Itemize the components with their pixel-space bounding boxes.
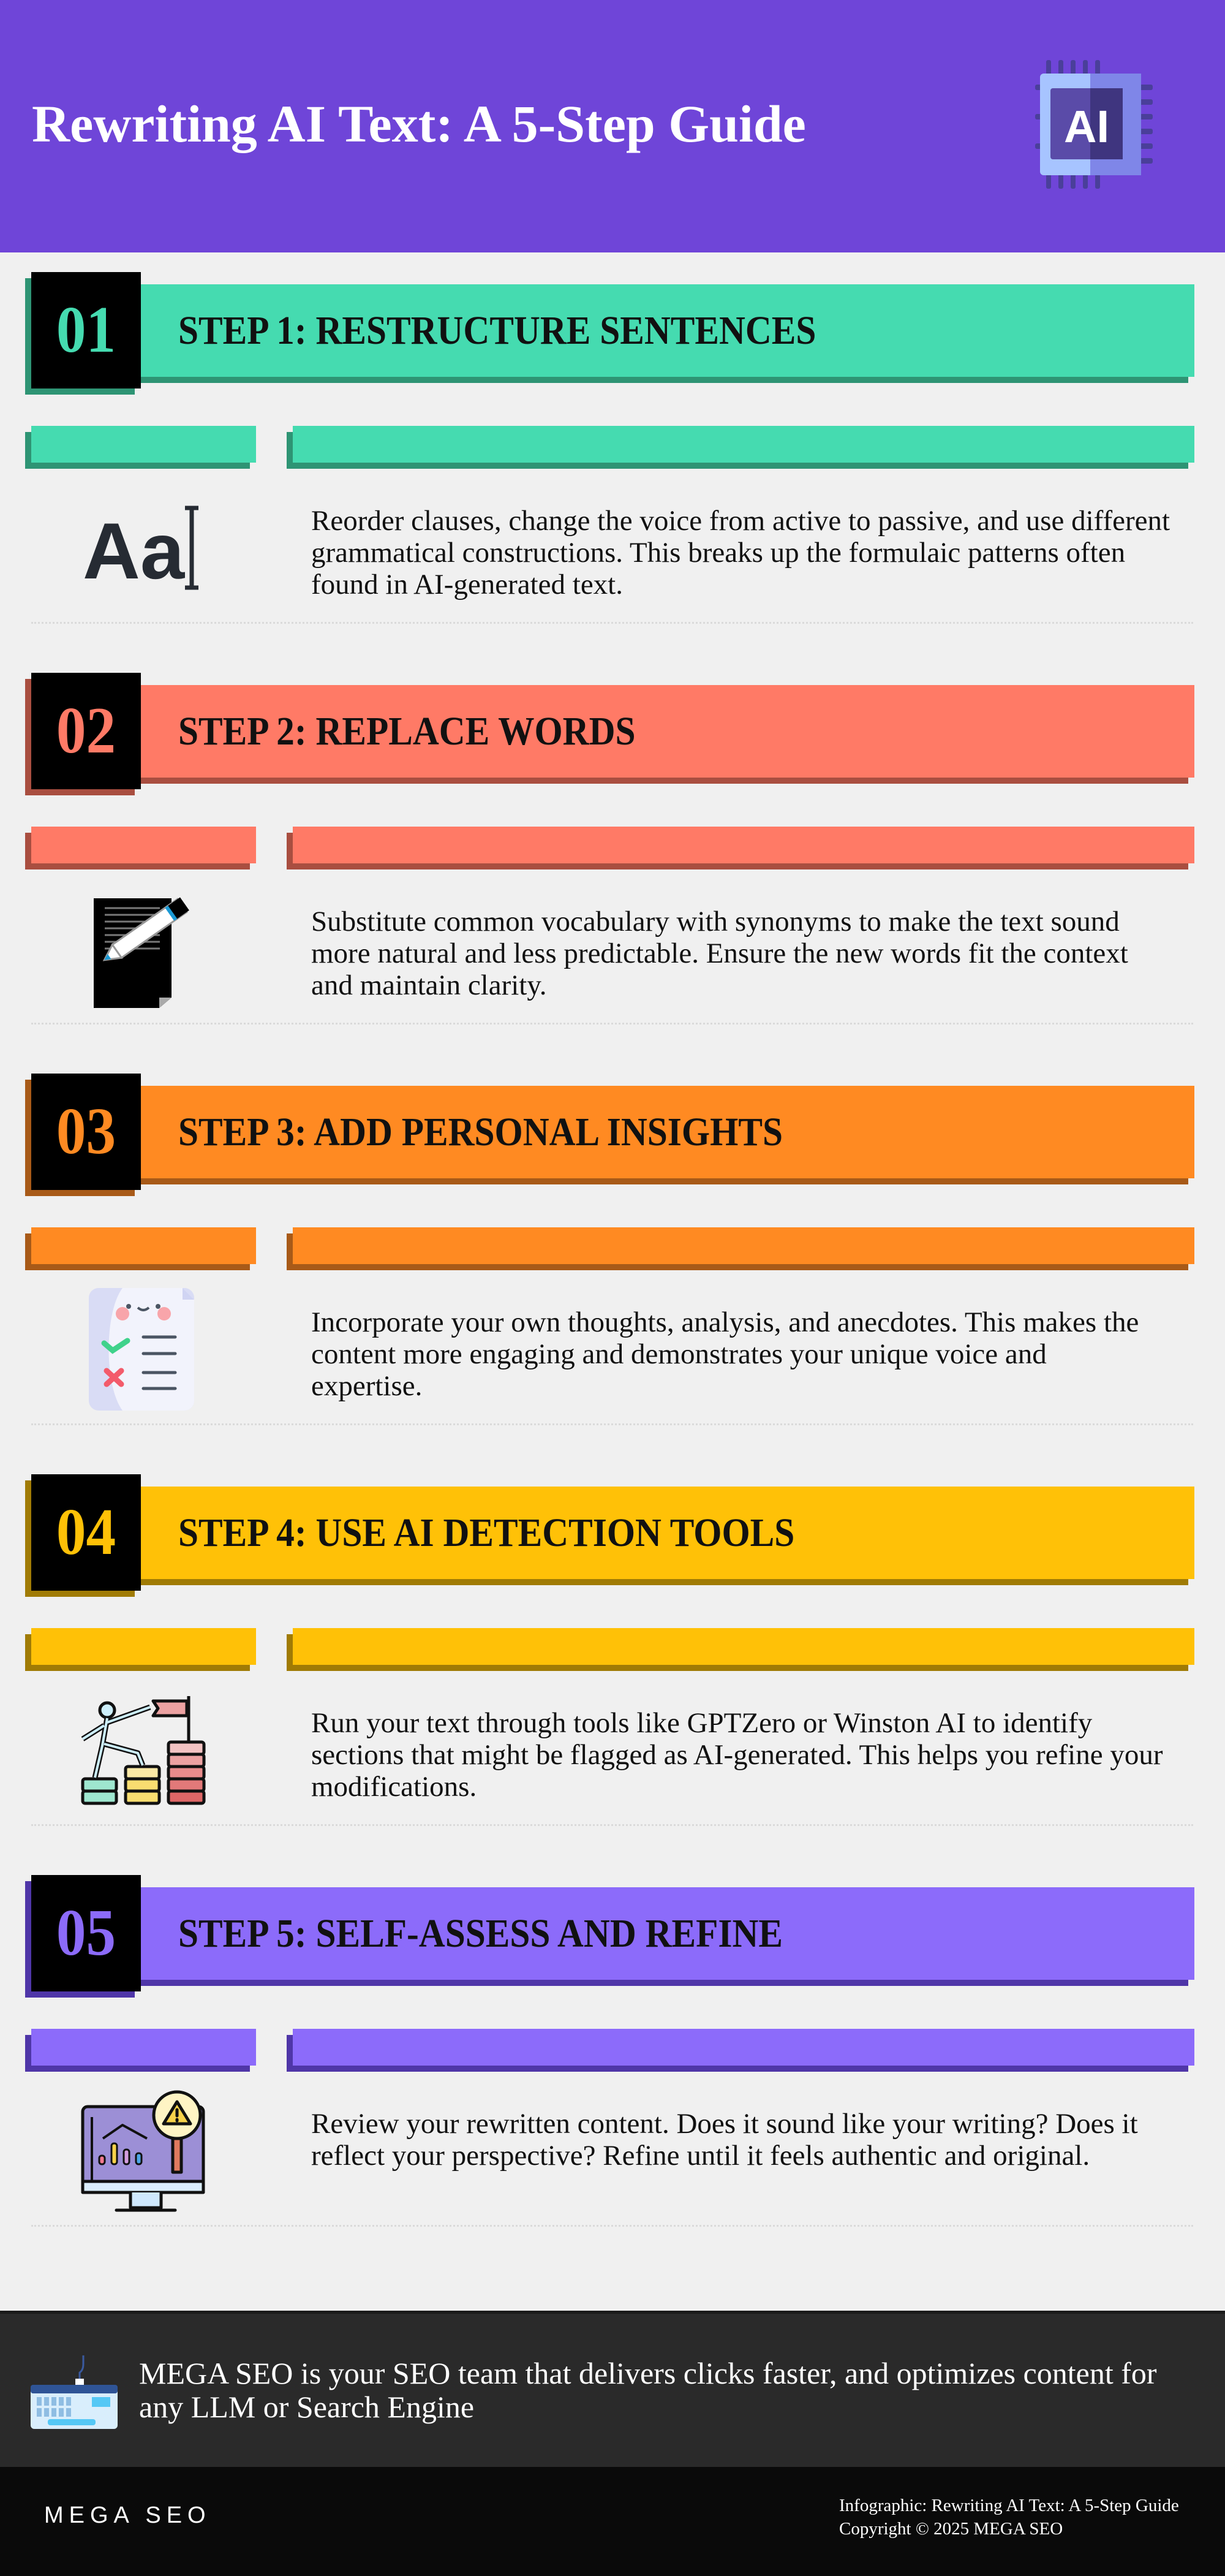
step 3 [25, 1074, 1194, 1425]
footer logo: MEGA SEO [44, 2502, 211, 2528]
step 4 text [311, 1707, 1163, 1803]
step 1 title bar [141, 284, 1194, 377]
step 5 [25, 1875, 1194, 2227]
icon: AI chip [1035, 60, 1153, 189]
icon: checklist document [89, 1288, 194, 1411]
step 5 text [311, 2108, 1138, 2172]
step 1 text [311, 505, 1170, 600]
number box 01 [31, 272, 141, 388]
step 1 text: grammatical constructions. This breaks up the formulaic patterns often [311, 537, 1125, 569]
footer credits: Copyright © 2025 MEGA SEO [839, 2519, 1063, 2539]
step 1 text: Reorder clauses, change the voice from active to passive, and use different [311, 505, 1170, 537]
step 2 text: more natural and less predictable. Ensure the new words fit the context [311, 938, 1128, 969]
step 3 text [311, 1306, 1139, 1402]
icon: Aa text: Aa [83, 506, 186, 596]
step 3 text: expertise. [311, 1370, 422, 1402]
title: Rewriting AI Text: A 5-Step Guide [32, 94, 806, 153]
number box 02 [31, 673, 141, 789]
step 5 title bar: STEP 5: SELF-ASSESS AND REFINE [178, 1911, 783, 1956]
step 1 text: found in AI-generated text. [311, 569, 623, 600]
icon: AI chip: AI [1064, 101, 1109, 152]
icon: monitor with warning magnifier [81, 2091, 205, 2212]
step 2 text: and maintain clarity. [311, 969, 547, 1001]
number box 04 [31, 1474, 141, 1591]
CTA band [0, 2311, 1225, 2467]
footer [0, 2467, 1225, 2576]
step 5 text: reflect your perspective? Refine until it feels authentic and original. [311, 2140, 1090, 2172]
footer credits: Infographic: Rewriting AI Text: A 5-Step Guide [839, 2496, 1179, 2515]
step 3 title bar: STEP 3: ADD PERSONAL INSIGHTS [178, 1110, 783, 1154]
number box 01: 01 [56, 294, 116, 366]
step 3 text: Incorporate your own thoughts, analysis, and anecdotes. This makes the [311, 1306, 1139, 1338]
step 5 title bar [141, 1887, 1194, 1980]
step 2 text [311, 906, 1128, 1001]
number box 05: 05 [56, 1896, 116, 1969]
step 4 [25, 1474, 1194, 1826]
step 4 text: sections that might be flagged as AI-generated. This helps you refine your [311, 1739, 1163, 1771]
number box 03 [31, 1074, 141, 1190]
CTA text: MEGA SEO is your SEO team that delivers clicks faster, and optimizes content for [139, 2356, 1157, 2390]
header [0, 0, 1225, 252]
step 3 title bar [141, 1086, 1194, 1178]
step 4 title bar: STEP 4: USE AI DETECTION TOOLS [178, 1510, 794, 1555]
footer credits [839, 2496, 1179, 2539]
step 2 title bar: STEP 2: REPLACE WORDS [178, 709, 636, 754]
step 2 text: Substitute common vocabulary with synonyms to make the text sound [311, 906, 1120, 938]
step 3 text: content more engaging and demonstrates your unique voice and [311, 1338, 1047, 1370]
CTA text: any LLM or Search Engine [139, 2390, 474, 2424]
icon: climbing steps with flag [81, 1696, 206, 1805]
number box 04: 04 [56, 1496, 116, 1569]
number box 03: 03 [56, 1095, 116, 1168]
number box 05 [31, 1875, 141, 1991]
CTA text [139, 2356, 1157, 2424]
number box 02: 02 [56, 694, 116, 767]
icon: document with pencil [94, 897, 189, 1008]
step 1 [25, 272, 1194, 624]
step 4 text: Run your text through tools like GPTZero or Winston AI to identify [311, 1707, 1092, 1739]
step 2 [25, 673, 1194, 1025]
step 1 title bar: STEP 1: RESTRUCTURE SENTENCES [178, 308, 816, 353]
step 2 title bar [141, 685, 1194, 778]
step 4 title bar [141, 1487, 1194, 1579]
step 4 text: modifications. [311, 1771, 477, 1803]
step 5 text: Review your rewritten content. Does it sound like your writing? Does it [311, 2108, 1138, 2140]
icon: keyboard [31, 2355, 118, 2429]
